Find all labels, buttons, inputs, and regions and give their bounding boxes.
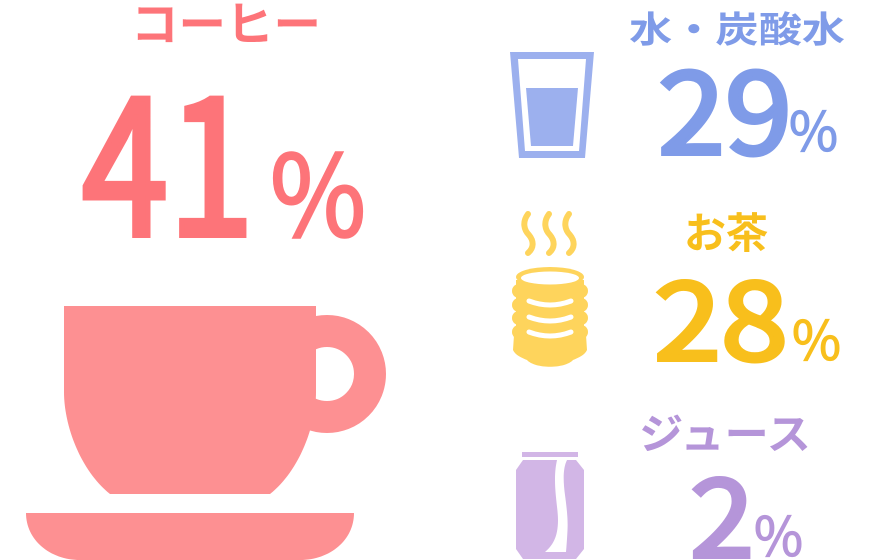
value: tea 28: 28 (654, 237, 788, 391)
percent sign: tea: % (792, 297, 841, 376)
percent sign: coffee: % (270, 107, 366, 269)
panel: juice (516, 411, 811, 560)
panel: tea (512, 210, 841, 391)
icon: glass of water (510, 52, 594, 158)
icon: juice can (516, 452, 584, 559)
icon: coffee cup (26, 306, 370, 560)
value: water 29: 29 (658, 25, 792, 187)
panel: water (510, 9, 845, 187)
panel: coffee (26, 0, 370, 560)
icon: steaming tea cup (512, 214, 588, 367)
heading: tea: お茶 (684, 210, 768, 257)
value: coffee 41: 41 (82, 19, 254, 289)
heading: water: 水・炭酸水 (629, 9, 845, 50)
heading: juice: ジュース (639, 411, 811, 458)
percent sign: water: % (789, 88, 838, 167)
